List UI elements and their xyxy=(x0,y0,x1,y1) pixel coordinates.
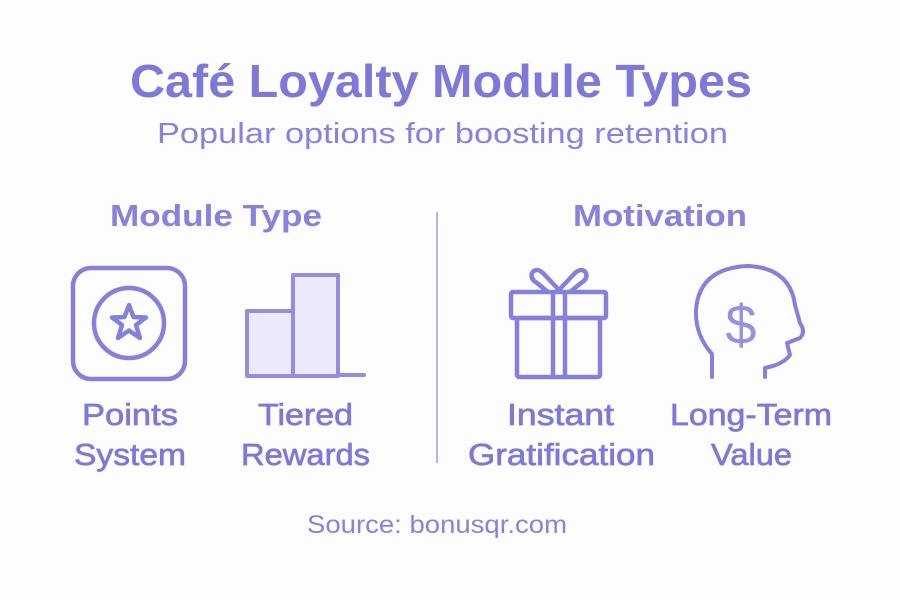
label: Points System: Points xyxy=(82,397,178,432)
label: Instant Gratification: Gratification xyxy=(468,437,655,472)
source: Source: bonusqr.com xyxy=(307,511,567,539)
title: Café Loyalty Module Types xyxy=(130,55,752,107)
heading: Module Type: Module Type xyxy=(110,198,322,233)
heading: Motivation: Motivation xyxy=(573,198,747,233)
icon: points badge xyxy=(73,268,185,379)
label: Points System: System xyxy=(74,437,186,472)
subtitle: Popular options for boosting retention xyxy=(157,118,728,150)
icon: gift xyxy=(511,270,606,377)
icon: head with dollar xyxy=(696,266,803,377)
label: Tiered Rewards: Rewards xyxy=(241,437,370,472)
icon: tiered bars xyxy=(247,275,364,376)
label: Long-Term Value: Value xyxy=(711,437,792,472)
icon: head with dollar: $ xyxy=(725,293,757,356)
label: Instant Gratification: Instant xyxy=(507,397,614,432)
label: Long-Term Value: Long-Term xyxy=(670,397,832,432)
label: Tiered Rewards: Tiered xyxy=(258,397,353,432)
